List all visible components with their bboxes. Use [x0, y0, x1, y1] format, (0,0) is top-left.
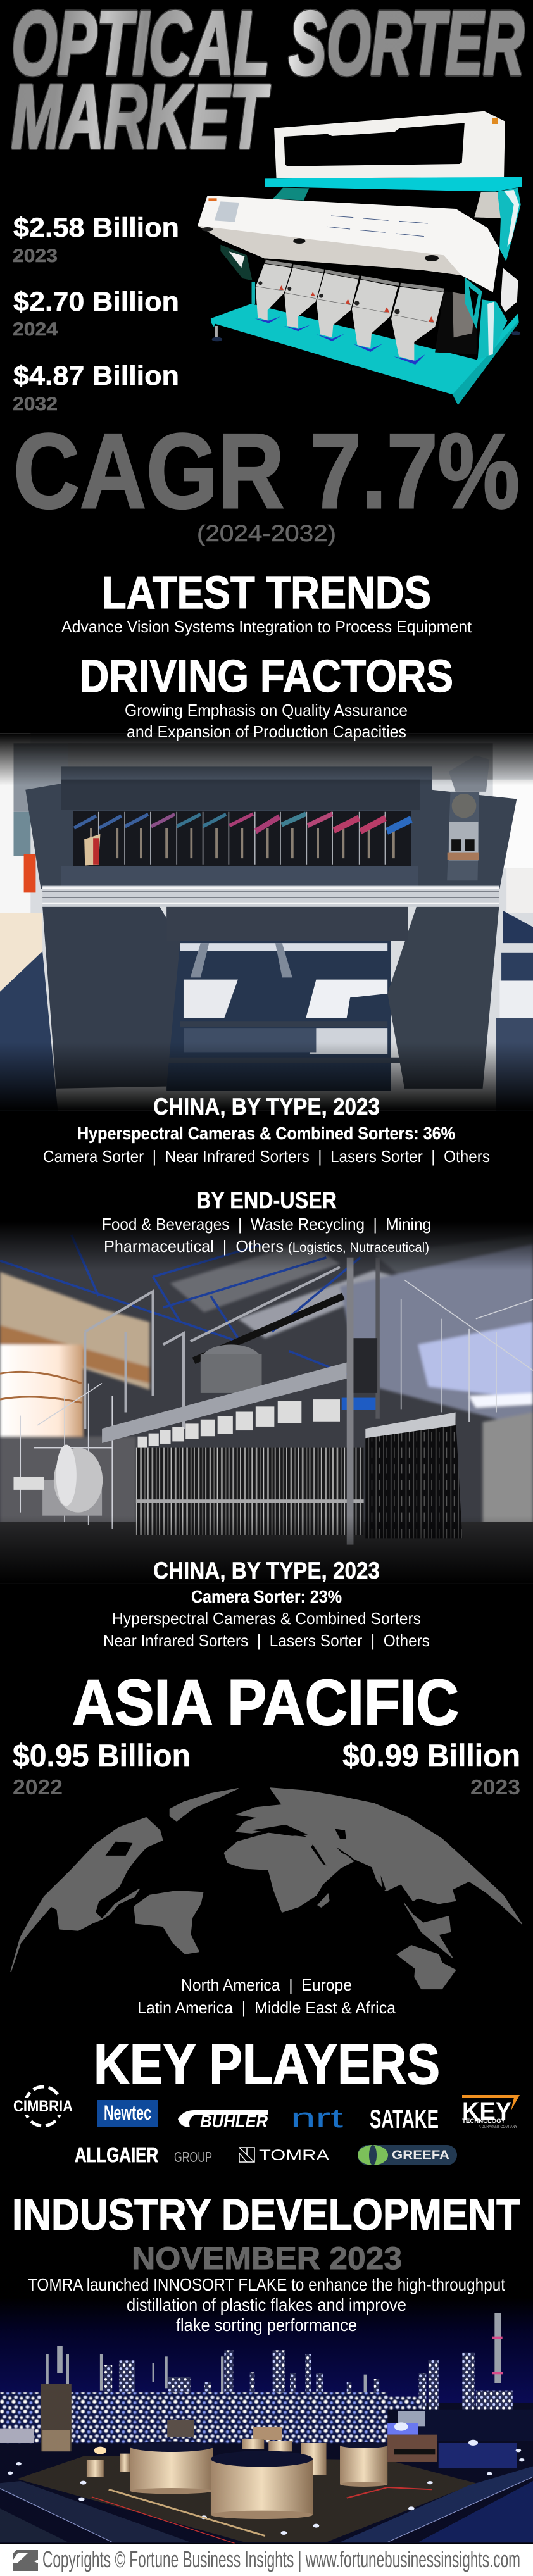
- logo: NRT: nrt: [291, 2103, 343, 2134]
- stat 2024: $2.70 Billion: [13, 287, 179, 317]
- key players heading: KEY PLAYERS: [94, 2033, 440, 2096]
- China by type 2023, second share: [103, 1558, 430, 1650]
- China by type 2023, second share: CHINA, BY TYPE, 2023: [153, 1558, 380, 1584]
- regions list: North America | Europe: [181, 1975, 352, 1994]
- logo: Newtec: [97, 2100, 158, 2127]
- industry development: flake sorting performance: [176, 2315, 357, 2335]
- logo: Key Technology: TECHNOLOGY: [462, 2118, 505, 2124]
- upper shelf and frame: [265, 177, 522, 312]
- latest trends: [61, 568, 472, 636]
- market size stats: [13, 213, 179, 415]
- Asia Pacific 2023 value: $0.99 Billion: [342, 1738, 520, 1773]
- regions list: [137, 1975, 396, 2017]
- stat 2023: [13, 213, 179, 266]
- title: MARKET: [11, 66, 270, 167]
- Asia Pacific 2022 value: [13, 1738, 191, 1799]
- stat 2032: $4.87 Billion: [13, 361, 179, 391]
- logo: Newtec: Newtec: [104, 2101, 151, 2124]
- China by type 2023, second share: Hyperspectral Cameras & Combined Sorters: [112, 1609, 421, 1628]
- latest trends: Advance Vision Systems Integration to Process Equipment: [61, 617, 472, 636]
- stat 2024: 2024: [13, 319, 58, 340]
- top camera box: [274, 111, 505, 178]
- logo: Greefa: [358, 2145, 457, 2165]
- regions list: Latin America | Middle East & Africa: [137, 1998, 396, 2017]
- logo: Cimbria: CIMBRIA: [13, 2098, 73, 2115]
- latest trends: LATEST TRENDS: [102, 568, 431, 618]
- Asia Pacific 2023 value: [342, 1738, 520, 1799]
- title: [11, 0, 524, 167]
- photo: vintage card sorter machine: [0, 733, 533, 1111]
- logo: Satake: SATAKE: [370, 2104, 439, 2134]
- stat 2032: [13, 361, 179, 415]
- photo: refinery at night: [0, 2298, 533, 2543]
- by end-user: BY END-USER: [196, 1187, 337, 1213]
- photo: industrial processing plant: [0, 1222, 533, 1584]
- stat 2024: [13, 287, 179, 340]
- logo: Key Technology: A DURAVANT COMPANY: [479, 2125, 517, 2129]
- China by type 2023, first share: CHINA, BY TYPE, 2023: [153, 1094, 380, 1120]
- machine illustration: optical sorter: [198, 111, 522, 405]
- logo: Allgaier Group: ALLGAIER: [75, 2143, 158, 2166]
- China by type 2023, first share: [43, 1094, 490, 1166]
- driving factors: [80, 651, 453, 741]
- China by type 2023, first share: Hyperspectral Cameras & Combined Sorters: 36%: [77, 1123, 455, 1143]
- stat 2032: 2032: [13, 394, 58, 415]
- driving factors: and Expansion of Production Capacities: [127, 722, 406, 741]
- logo: Tomra: [239, 2147, 329, 2164]
- by end-user: Pharmaceutical | Others (Logistics, Nutraceutical): [104, 1237, 429, 1256]
- Asia Pacific 2022 value: $0.95 Billion: [13, 1738, 191, 1773]
- industry development: distillation of plastic flakes and improve: [127, 2295, 406, 2315]
- title: MARKET: [11, 66, 270, 167]
- main sorter body: [198, 118, 499, 292]
- industry development: [12, 2190, 520, 2335]
- by end-user: [102, 1187, 431, 1256]
- logo: Cimbria: [11, 2087, 75, 2126]
- blue feet: [255, 316, 425, 365]
- logo: Tomra: TOMRA: [259, 2147, 329, 2164]
- logo: Allgaier Group: GROUP: [174, 2149, 212, 2165]
- China by type 2023, second share: Camera Sorter: 23%: [191, 1587, 342, 1606]
- China by type 2023, first share: Camera Sorter | Near Infrared Sorters | Lasers Sorter | Others: [43, 1147, 490, 1166]
- by end-user: Food & Beverages | Waste Recycling | Mining: [102, 1215, 431, 1234]
- driving factors: Growing Emphasis on Quality Assurance: [125, 701, 408, 720]
- Asia Pacific heading: ASIA PACIFIC: [72, 1666, 459, 1739]
- hopper chutes: [256, 261, 444, 361]
- Asia Pacific 2022 value: 2022: [13, 1775, 63, 1799]
- industry development: NOVEMBER 2023: [132, 2241, 402, 2276]
- logo: Key Technology: KEY: [462, 2098, 511, 2125]
- stat 2023: $2.58 Billion: [13, 213, 179, 243]
- Asia Pacific 2023 value: 2023: [470, 1775, 520, 1799]
- logo: Greefa: GREEFA: [392, 2149, 449, 2162]
- icon: Fortune Business Insights logo: [13, 2550, 38, 2571]
- China by type 2023, second share: Near Infrared Sorters | Lasers Sorter | Others: [103, 1631, 430, 1650]
- stat 2023: 2023: [13, 246, 58, 266]
- logo: Buhler: BÜHLER: [200, 2111, 268, 2131]
- machine base: [211, 277, 520, 405]
- logos: key players: [11, 2087, 520, 2166]
- CAGR: (2024-2032): [197, 520, 336, 546]
- driving factors: DRIVING FACTORS: [80, 651, 453, 702]
- globe map: [11, 1788, 522, 1989]
- logo: Buhler: [178, 2110, 268, 2131]
